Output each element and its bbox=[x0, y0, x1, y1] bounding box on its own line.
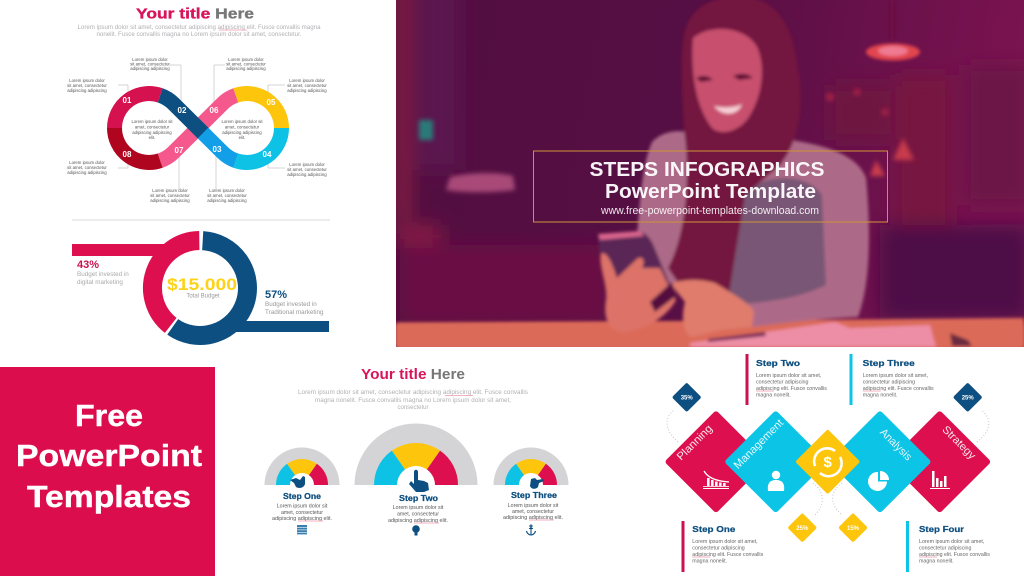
step numbers: 08 bbox=[123, 150, 132, 159]
title box bbox=[534, 151, 888, 222]
text block: step three: adipiscing elit. Fusce convallis bbox=[863, 386, 934, 392]
text block: step four: consectetur adipiscing bbox=[919, 546, 971, 552]
heading: Your title Here bbox=[361, 367, 465, 383]
text block: step four: adipiscing elit. Fusce convallis bbox=[919, 552, 990, 558]
left hand bbox=[600, 253, 676, 332]
icon: anchor bbox=[526, 525, 536, 535]
promo text: PowerPoint: PowerPoint bbox=[16, 438, 202, 473]
diamond label: Analysis: Analysis bbox=[877, 426, 914, 464]
text block: step three: magna nonelit. bbox=[863, 392, 897, 398]
step numbers: 04 bbox=[263, 150, 272, 159]
pendant lamp bbox=[866, 44, 920, 60]
loop centre text right: amet, consectetur bbox=[225, 124, 260, 130]
step three text: adipiscing adipiscing elit. bbox=[503, 515, 563, 521]
icon: pie chart bbox=[868, 471, 889, 491]
badge: 15 percent yellow: 15% bbox=[847, 526, 860, 532]
callout labels: sit amet, consectetur bbox=[67, 83, 107, 88]
step numbers: 06 bbox=[210, 106, 219, 115]
panel: budget donut chart bbox=[72, 240, 329, 336]
text block: step one: magna nonelit. bbox=[692, 558, 727, 564]
icon: hand holding bbox=[290, 476, 305, 488]
step numbers: 07 bbox=[175, 146, 184, 155]
panel: gauge steps bbox=[264, 367, 568, 536]
callout labels: Lorem ipsum dolor bbox=[228, 57, 264, 62]
callout labels: Lorem ipsum dolor bbox=[69, 160, 105, 165]
callout labels: sit amet, consectetur bbox=[287, 167, 327, 172]
intro text: magna nonelit. Fusce convallis magna no Lorem ipsum dolor sit amet, bbox=[315, 398, 511, 404]
diamond label: Strategy: Strategy bbox=[940, 424, 978, 462]
icon: bar chart bbox=[930, 471, 950, 489]
step two text: adipiscing adipiscing elit. bbox=[388, 518, 448, 524]
total amount: $15.000 bbox=[167, 275, 237, 294]
callout labels: adipiscing adipiscing bbox=[207, 198, 247, 203]
step three text: amet, consectetur bbox=[512, 509, 554, 515]
gauge: step one bbox=[264, 448, 340, 488]
loop centre text left: elit. bbox=[149, 135, 155, 140]
badge: 25 percent yellow bbox=[787, 513, 817, 543]
loop centre text left: amet, consectetur bbox=[135, 124, 170, 130]
callout labels: adipiscing adipiscing bbox=[287, 88, 327, 93]
hair bbox=[668, 0, 801, 300]
intro text: consectetur bbox=[397, 405, 429, 411]
book bbox=[690, 322, 936, 347]
loop centre text right: elit. bbox=[239, 135, 245, 140]
red leader bar bbox=[72, 244, 165, 256]
callout labels: adipiscing adipiscing bbox=[226, 66, 266, 71]
43 percent legend bbox=[77, 259, 129, 286]
sweater centre shadow bbox=[714, 178, 826, 304]
icon: database bbox=[297, 525, 307, 534]
43 percent legend: Budget invested in bbox=[77, 271, 129, 278]
text block: step four: magna nonelit. bbox=[919, 558, 954, 564]
gauge: step two bbox=[354, 423, 478, 492]
intro text bbox=[78, 25, 321, 38]
text block: step two: Lorem ipsum dolor sit amet, bbox=[756, 373, 821, 379]
callout labels: Lorem ipsum dolor bbox=[289, 78, 325, 83]
diamond label: Planning: Planning bbox=[675, 423, 715, 463]
text block: step two: adipiscing elit. Fusce convallis bbox=[756, 386, 827, 392]
infinity loop segments bbox=[114, 94, 282, 162]
badge: 25 percent navy: 25% bbox=[962, 396, 974, 402]
intro text: Lorem ipsum dolor sit amet, consectetur adipiscing adipiscing elit. Fusce convallis bbox=[298, 390, 528, 396]
57 percent legend: Traditional marketing bbox=[265, 309, 324, 316]
divider bbox=[72, 220, 330, 221]
callout labels: adipiscing adipiscing bbox=[67, 170, 107, 175]
step three text: Step Three bbox=[511, 490, 557, 500]
text block: step one: Step One bbox=[692, 524, 736, 534]
loop centre text right: adipiscing adipiscing bbox=[222, 130, 262, 135]
step one text: adipiscing adipiscing elit. bbox=[272, 516, 332, 522]
step two text: Step Two bbox=[399, 493, 438, 503]
callout labels: sit amet, consectetur bbox=[150, 193, 190, 198]
callout labels: sit amet, consectetur bbox=[287, 83, 327, 88]
photo title line 2: PowerPoint Template bbox=[605, 181, 816, 203]
icon: user bbox=[768, 471, 784, 491]
step numbers: 03 bbox=[213, 145, 222, 154]
intro text bbox=[298, 390, 528, 411]
diamond: planning bbox=[664, 410, 768, 513]
callout labels: adipiscing adipiscing bbox=[287, 172, 327, 177]
callout labels: Lorem ipsum dolor bbox=[209, 188, 245, 193]
icon: dollar cycle: $ bbox=[824, 454, 833, 471]
text block: step three: Lorem ipsum dolor sit amet, bbox=[863, 373, 928, 379]
step two text: amet, consectetur bbox=[397, 512, 439, 518]
callout labels: adipiscing adipiscing bbox=[130, 66, 170, 71]
text block: step two bbox=[746, 354, 827, 405]
callout labels: sit amet, consectetur bbox=[67, 165, 107, 170]
text block: step one: adipiscing elit. Fusce convallis bbox=[692, 552, 764, 558]
callout labels: adipiscing adipiscing bbox=[150, 198, 190, 203]
dotted arrows bbox=[667, 410, 989, 515]
intro text: Lorem ipsum dolor sit amet, consectetur adipiscing adipiscing elit. Fusce convallis magna bbox=[78, 25, 321, 31]
loop centre text left: Lorem ipsum dolor sit bbox=[131, 119, 173, 124]
panel: infinity infographic bbox=[67, 6, 327, 203]
loop centre text left bbox=[131, 119, 173, 140]
diamond: centre yellow bbox=[795, 429, 860, 494]
loop centre text right bbox=[221, 119, 263, 140]
diamond label: Management: Management bbox=[732, 417, 786, 472]
step three text: Lorem ipsum dolor sit bbox=[508, 503, 559, 509]
step numbers bbox=[123, 96, 276, 159]
callout labels: Lorem ipsum dolor bbox=[152, 188, 188, 193]
step one text: Lorem ipsum dolor sit bbox=[277, 504, 328, 510]
photo title line 1: STEPS INFOGRAPHICS bbox=[590, 159, 824, 181]
step numbers: 01 bbox=[123, 96, 132, 105]
face bbox=[692, 29, 762, 132]
website url: www.free-powerpoint-templates-download.com bbox=[600, 205, 819, 217]
gauge: step three bbox=[494, 448, 568, 489]
donut segment 57 percent bbox=[173, 241, 247, 336]
badge: 25 percent navy bbox=[953, 382, 983, 412]
text block: step two: Step Two bbox=[756, 358, 800, 368]
callout labels: Lorem ipsum dolor bbox=[289, 162, 325, 167]
callout labels: sit amet, consectetur bbox=[226, 62, 266, 66]
panel: diamond process bbox=[664, 354, 991, 572]
text block: step four: Step Four bbox=[919, 524, 965, 534]
step two text bbox=[388, 493, 448, 524]
57 percent legend bbox=[265, 289, 324, 316]
loop centre text right: Lorem ipsum dolor sit bbox=[221, 119, 263, 124]
badge: 35 percent: 35% bbox=[681, 396, 693, 402]
step one text bbox=[272, 491, 332, 522]
text block: step one: Lorem ipsum dolor sit amet, bbox=[692, 539, 758, 545]
callout labels: sit amet, consectetur bbox=[130, 62, 170, 66]
glasses bbox=[950, 333, 972, 346]
photo: woman using a smartphone, magenta duotone bbox=[396, 0, 1024, 350]
badge: 25 percent yellow: 25% bbox=[796, 526, 809, 532]
loop centre text left: adipiscing adipiscing bbox=[132, 130, 172, 135]
table top bbox=[396, 318, 1024, 347]
icon: light bulb bbox=[412, 525, 420, 536]
43 percent legend: 43% bbox=[77, 259, 99, 271]
icon: dollar cycle bbox=[814, 448, 842, 476]
callout labels bbox=[67, 57, 327, 203]
step one text: amet, consectetur bbox=[281, 510, 323, 516]
diamond: strategy bbox=[888, 410, 991, 513]
icon: pointing hand bbox=[409, 470, 429, 492]
intro text: nonelit. Fusce convallis magna no Lorem ipsum dolor sit amet, consectetur. bbox=[96, 32, 302, 38]
total label: Total Budget bbox=[186, 294, 220, 300]
step two text: Lorem ipsum dolor sit bbox=[393, 505, 444, 511]
callout labels: sit amet, consectetur bbox=[207, 193, 247, 198]
text block: step four: Lorem ipsum dolor sit amet, bbox=[919, 539, 984, 545]
heading: Your title Here bbox=[136, 6, 254, 22]
text block: step three: consectetur adipiscing bbox=[863, 380, 915, 386]
57 percent legend: Budget invested in bbox=[265, 301, 317, 308]
callout labels: Lorem ipsum dolor bbox=[132, 57, 168, 62]
diamond: analysis bbox=[828, 410, 932, 513]
icon: hand tapping bbox=[530, 478, 544, 489]
step numbers: 05 bbox=[267, 98, 276, 107]
callout labels: Lorem ipsum dolor bbox=[69, 78, 105, 83]
text block: step three: Step Three bbox=[863, 358, 915, 368]
diamond: management bbox=[724, 410, 827, 513]
right hand bbox=[672, 280, 754, 337]
callout labels: adipiscing adipiscing bbox=[67, 88, 107, 93]
sweater body bbox=[636, 131, 869, 327]
promo text: Templates: Templates bbox=[27, 479, 191, 514]
57 percent legend: 57% bbox=[265, 289, 287, 301]
badge: 15 percent yellow bbox=[838, 513, 868, 543]
text block: step three bbox=[850, 354, 934, 405]
text block: step two: consectetur adipiscing bbox=[756, 380, 808, 386]
text block: step two: magna nonelit. bbox=[756, 392, 791, 398]
step one text: Step One bbox=[283, 491, 321, 501]
phone bbox=[598, 232, 670, 286]
text block: step four bbox=[906, 521, 990, 572]
panel: red promo box bbox=[0, 367, 215, 576]
icon: declining chart bbox=[703, 471, 729, 489]
promo text: Free: Free bbox=[75, 398, 143, 433]
connector lines bbox=[118, 65, 285, 190]
step numbers: 02 bbox=[178, 106, 187, 115]
badge: 35 percent bbox=[672, 382, 702, 412]
blue leader bar bbox=[226, 321, 329, 332]
text block: step one bbox=[682, 521, 764, 572]
text block: step one: consectetur adipiscing bbox=[692, 546, 745, 552]
donut segment 43 percent bbox=[152, 240, 199, 325]
step three text bbox=[503, 490, 563, 521]
43 percent legend: digital marketing bbox=[77, 279, 123, 286]
